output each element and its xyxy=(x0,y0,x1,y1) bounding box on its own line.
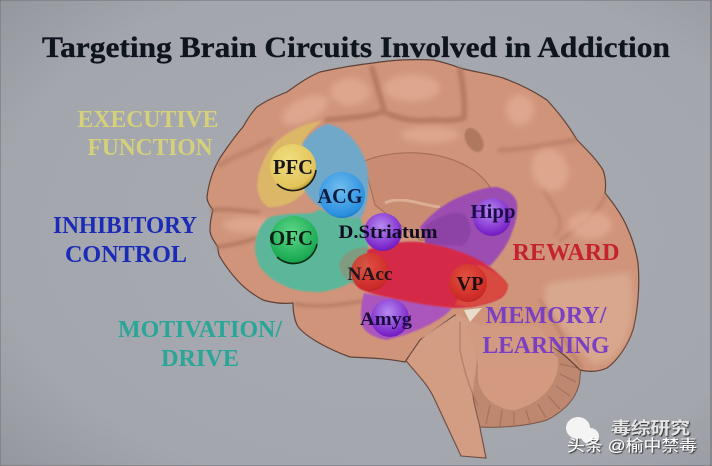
watermark xyxy=(566,417,697,455)
node: VP xyxy=(449,264,487,302)
brainstem crease xyxy=(460,322,478,405)
label: memory/learning: MEMORY/ xyxy=(486,303,607,329)
node: OFC xyxy=(269,216,318,264)
zone: inhibitory control blue xyxy=(301,124,369,219)
node: OFC: OFC xyxy=(269,226,313,250)
label: inhibitory control xyxy=(53,213,197,268)
title: Targeting Brain Circuits Involved in Addiction xyxy=(42,31,670,64)
seam patch: occipital to cerebellum xyxy=(466,325,556,362)
watermark: 头条 @榆中禁毒 xyxy=(567,437,697,455)
cerebellum light lobe xyxy=(478,347,558,410)
cerebellum xyxy=(469,340,585,427)
label: executive function xyxy=(78,107,218,161)
icon: chat bubbles xyxy=(566,417,599,444)
label: motivation/drive: MOTIVATION/ xyxy=(118,317,282,343)
label: inhibitory control: CONTROL xyxy=(65,242,187,268)
node: PFC xyxy=(270,144,316,191)
label: memory/learning: LEARNING xyxy=(482,333,610,359)
gyri shading xyxy=(212,68,606,368)
label: memory/learning xyxy=(482,303,610,359)
light highlights xyxy=(222,74,612,239)
node: D.Striatum: D.Striatum xyxy=(338,222,438,243)
node: VP: VP xyxy=(456,273,484,295)
node: Hipp: Hipp xyxy=(470,201,516,223)
label: executive function: FUNCTION xyxy=(88,135,213,161)
label: executive function: EXECUTIVE xyxy=(78,107,218,133)
cerebrum xyxy=(207,60,639,371)
node: NAcc: NAcc xyxy=(348,264,392,285)
node: Amyg xyxy=(360,299,413,337)
zone: memory purple upper xyxy=(420,187,517,266)
brainstem xyxy=(398,320,486,458)
label: reward: REWARD xyxy=(512,240,620,266)
label: motivation/drive xyxy=(118,317,282,372)
label: inhibitory control: INHIBITORY xyxy=(53,213,197,239)
node: ACG: ACG xyxy=(318,184,362,208)
zone: memory purple lower xyxy=(361,293,452,340)
zone: motivation green xyxy=(255,209,368,292)
watermark: 毒综研究 xyxy=(611,418,690,438)
node: D.Striatum xyxy=(338,213,438,251)
dark patch xyxy=(461,125,487,155)
zone: executive function yellow xyxy=(257,121,322,207)
overlap: NAcc grey-green xyxy=(339,247,368,285)
node: ACG xyxy=(318,172,365,218)
seam patch: temporal to brainstem xyxy=(410,314,480,398)
node: PFC: PFC xyxy=(273,155,313,179)
brain illustration xyxy=(207,60,639,458)
light sliver xyxy=(464,308,482,322)
node: Amyg: Amyg xyxy=(360,309,413,330)
fornix line xyxy=(385,200,440,207)
label: motivation/drive: DRIVE xyxy=(161,346,239,372)
occipital light lobe xyxy=(545,272,633,364)
zone: memory inner shade xyxy=(425,213,471,246)
zone: reward red xyxy=(350,242,507,308)
corpus callosum xyxy=(362,153,505,240)
node: Hipp xyxy=(470,198,516,236)
node: NAcc xyxy=(348,253,392,291)
cerebellum folds xyxy=(486,364,578,426)
zone: reward orange tip xyxy=(455,265,508,307)
